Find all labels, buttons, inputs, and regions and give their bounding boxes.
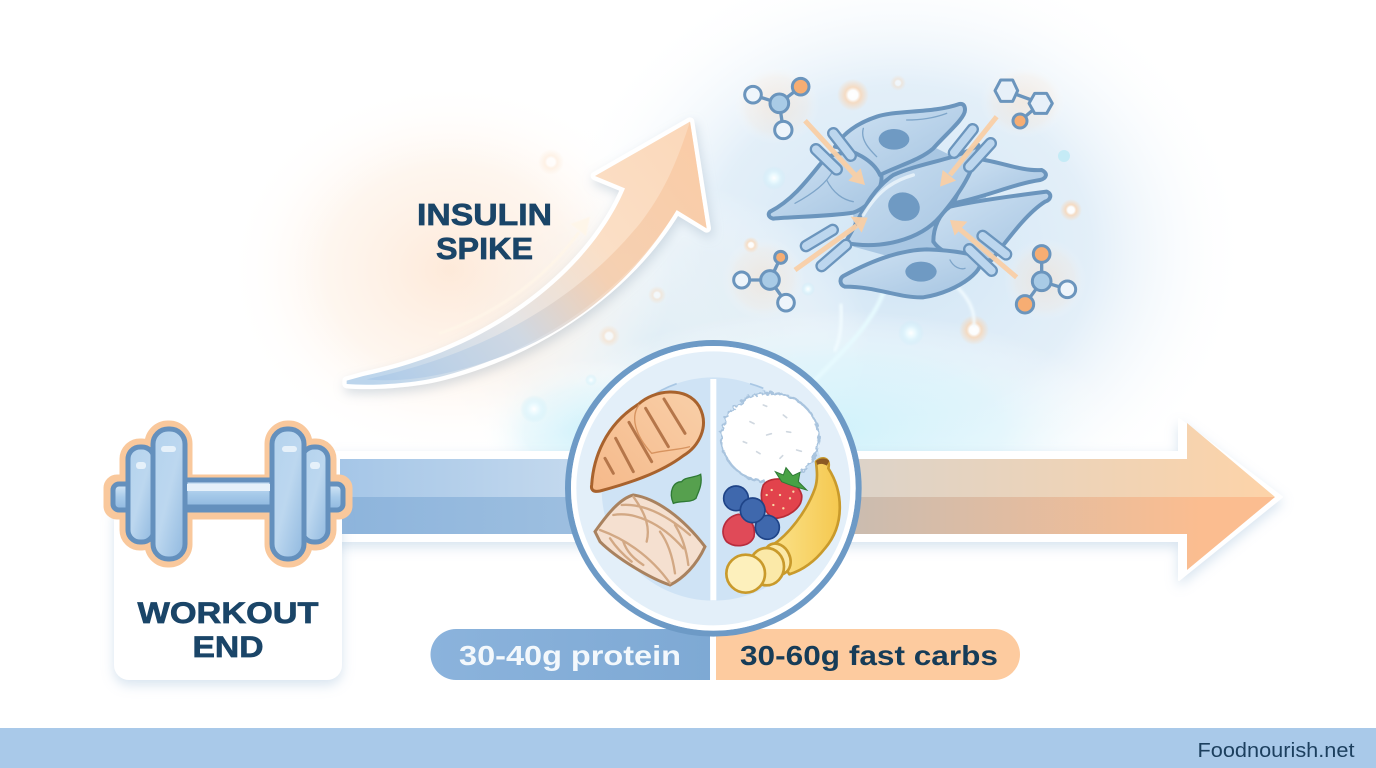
cell: centre [845,145,978,245]
molecule: bottom right [1016,246,1076,313]
pill: protein [430,629,710,680]
nutrient arrows into cell [795,117,1017,277]
cell: left [769,153,882,219]
food: salmon fillet [595,495,705,585]
cell: bottom [841,249,981,297]
nucleus: bottom cell [905,262,937,282]
cell: upper right [953,158,1046,203]
molecule: bottom left [734,251,794,311]
background glows [297,23,1166,451]
membrane channels [806,129,1006,271]
molecule: top left [745,78,809,139]
heading: workout end [138,597,318,664]
timeline: blue section [340,459,580,534]
food: rice [721,393,819,482]
muscle cells [722,65,1087,322]
food: banana slices [726,539,796,593]
food: raspberry [723,514,754,546]
molecule glows [722,65,1087,322]
workout end card [111,428,345,680]
nucleus: centre cell [884,188,924,225]
molecule: top right [995,80,1052,128]
insulin spike curved arrow [347,122,707,385]
cell: top [835,104,965,175]
heading: insulin spike: SPIKE [436,231,533,266]
footer bar: Foodnourish.net [1198,740,1355,762]
food: grilled chicken [591,392,703,491]
pill: carbs: 30-60g fast carbs [740,640,998,671]
food: parsley [671,474,701,503]
heading: workout end: END [192,631,264,664]
pill: carbs [716,629,1020,680]
pill: protein: 30-40g protein [459,640,681,671]
food: blueberries [724,486,779,539]
heading: workout end: WORKOUT [138,597,318,630]
footer bar [0,728,1376,768]
cell mass backing [853,143,997,267]
timeline arrow [330,419,1282,580]
food: strawberry [761,468,807,518]
heading: insulin spike: INSULIN [417,197,552,232]
sparkle particles [520,75,1082,423]
timeline: orange section [850,423,1275,570]
icon: dumbbell [111,428,345,560]
heading: insulin spike [417,197,552,266]
light trails from plate to cells [815,288,974,380]
meal plate [568,343,859,634]
macro labels pill [430,629,1020,680]
cell: lower right [933,192,1050,261]
food: banana [772,458,840,574]
nucleus: top cell [879,129,909,150]
